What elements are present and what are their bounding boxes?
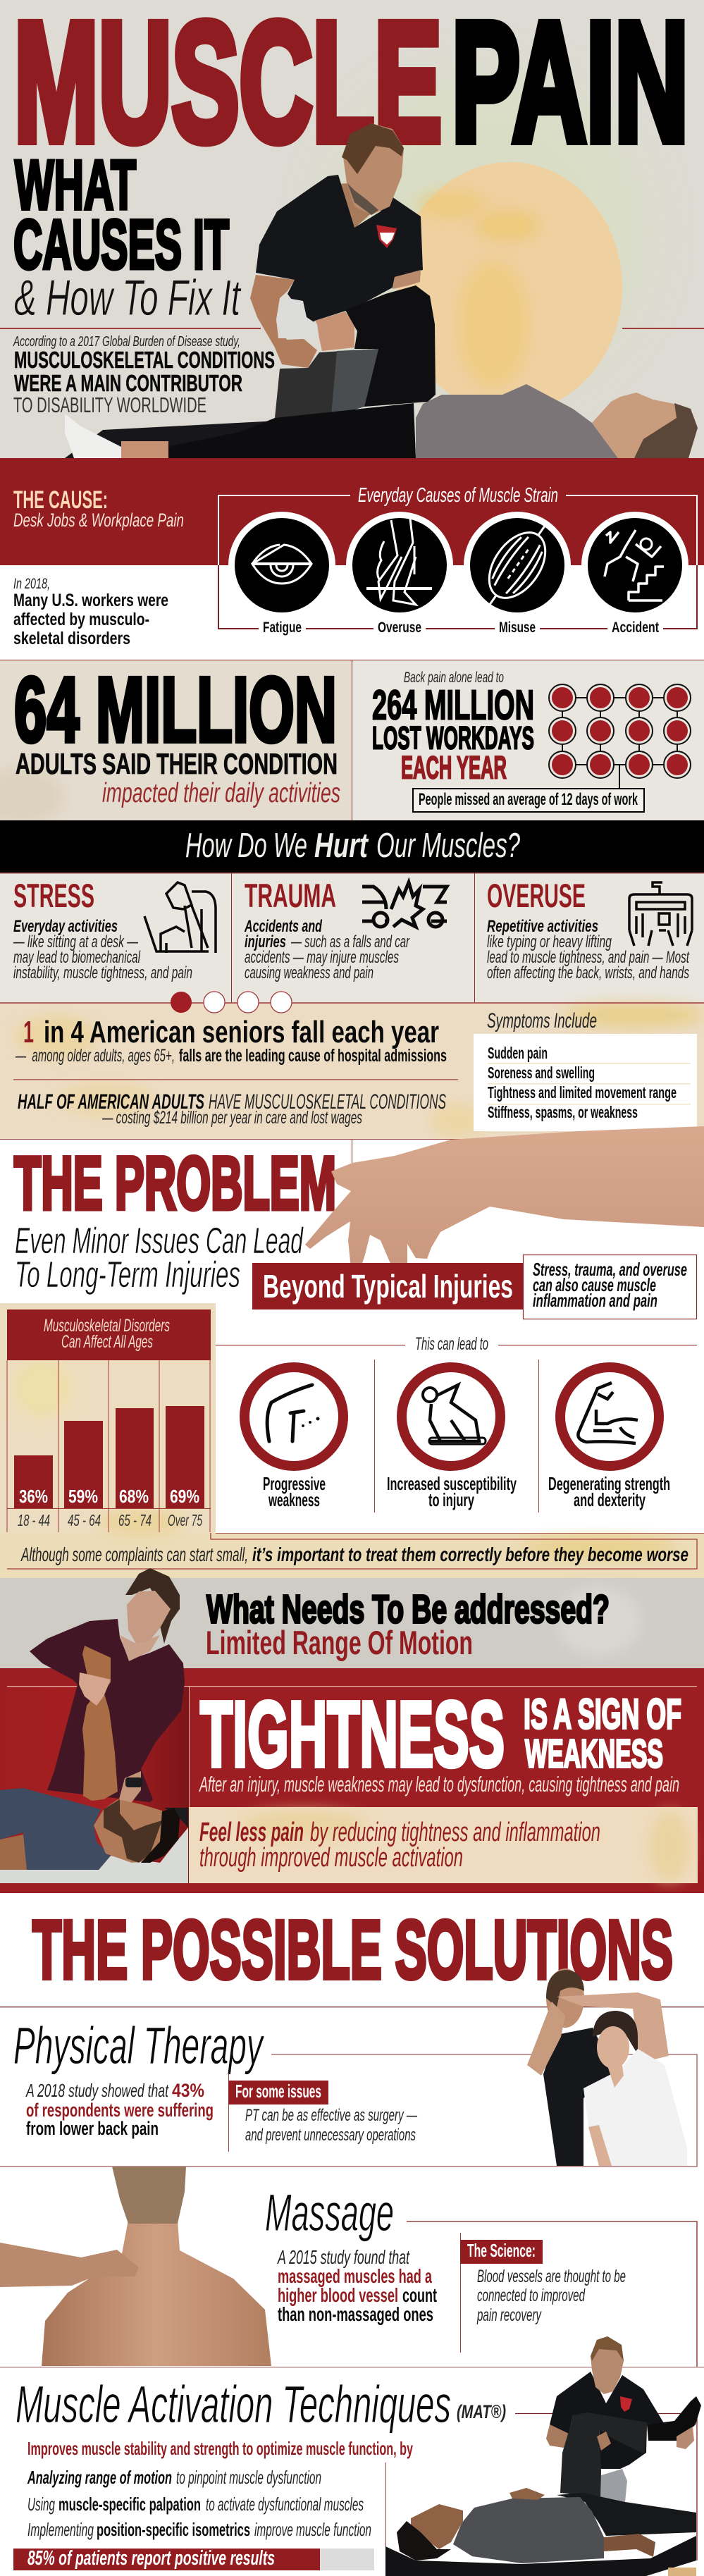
intro text: According to a 2017 Global Burden of Disease study, [13, 334, 240, 350]
sun circle [397, 162, 622, 413]
list: mat methods: to pinpoint muscle dysfunction [176, 2467, 321, 2488]
cause labels [263, 620, 659, 636]
panel: 64 million: 64 MILLION [14, 658, 337, 761]
callout: feel less pain: Feel less pain [199, 1818, 304, 1847]
panel: muscle activation techniques: Muscle Activation Techniques [16, 2375, 451, 2434]
text: treat correctly: Although some complaints can start small, [20, 1543, 248, 1565]
icon: keyboard hands [629, 882, 692, 946]
callout: beyond typical injuries: Beyond Typical Injuries [263, 1268, 513, 1305]
panel: hero [0, 0, 704, 458]
symptoms list [474, 1009, 697, 1131]
cause labels: Fatigue [263, 620, 302, 636]
bar chart: disorders by age: Musculoskeletal Disorders [44, 1316, 170, 1336]
subtitle [13, 159, 242, 316]
text: 2018 study: of respondents were suffering [26, 2100, 214, 2121]
panel: muscle activation techniques: Improves muscle stability and strength to optimize muscle function, by [27, 2438, 413, 2459]
intro text: WERE A MAIN CONTRIBUTOR [14, 370, 242, 396]
panel: chart background [0, 1303, 704, 1578]
panel: stress [13, 877, 216, 982]
cause heading [13, 486, 184, 531]
text: 2015 study: higher blood vessel [278, 2284, 398, 2306]
panel: muscle activation techniques: (MAT®) [457, 2401, 506, 2422]
heading: the problem [14, 1140, 336, 1295]
bar chart: disorders by age [7, 1309, 211, 1532]
panel: stress: — like sitting at a desk — [13, 932, 139, 951]
text: 2018 study: A 2018 study showed that [25, 2080, 169, 2101]
causes frame: Everyday Causes of Muscle Strain [358, 484, 558, 507]
text: 2015 study [277, 2246, 437, 2325]
bar: over 75: 69% [170, 1486, 199, 1507]
icon: progressive weakness: weakness [268, 1489, 320, 1510]
icon: accident fall [581, 512, 688, 619]
cause labels: Accident [612, 620, 659, 636]
icon: desk worker [144, 882, 216, 953]
intro text [13, 334, 275, 417]
bar: 65-74: 68% [119, 1486, 149, 1507]
panel: stress: instability, muscle tightness, and pain [13, 963, 192, 982]
bar: 65-74 [116, 1408, 154, 1529]
panel: the cause [0, 458, 704, 661]
stat: half of adults: HAVE MUSCULOSKELETAL CONDITIONS [209, 1090, 446, 1114]
panel: trauma: — such as a falls and car [290, 932, 410, 951]
panel: what needs to be addressed: Limited Range Of Motion [206, 1624, 473, 1661]
text: treat correctly [20, 1543, 688, 1565]
callout: the science [460, 2240, 626, 2325]
bar: 18-44: 36% [19, 1486, 48, 1507]
callout: the science: The Science: [467, 2240, 536, 2261]
stat: one in four [15, 1015, 447, 1066]
icon: degenerating strength [548, 1367, 670, 1510]
callout: feel less pain: through improved muscle activation [199, 1843, 463, 1873]
workers text [13, 576, 168, 648]
panel: stress: Everyday activities [13, 917, 118, 936]
stat: one in four: — among older adults, ages 65+, [15, 1046, 175, 1066]
icon: degenerating strength: and dexterity [574, 1489, 646, 1510]
icon: misuse muscle [464, 512, 571, 620]
bar chart: disorders by age: Can Affect All Ages [61, 1332, 153, 1352]
panel: stress: STRESS [13, 877, 94, 914]
stat: one in four: falls are the leading cause of hospital admissions [179, 1046, 447, 1066]
panel: physical therapy [0, 1968, 704, 2167]
photo: reaching hand [305, 1126, 704, 1273]
heading: the problem: THE PROBLEM [14, 1140, 336, 1225]
panel: three causes [0, 873, 704, 1003]
callout: for some issues: and prevent unnecessary operations [245, 2126, 416, 2145]
panel: tightness [0, 1568, 704, 1893]
stat: one in four: in 4 American seniors fall each year [44, 1015, 439, 1049]
intro text: MUSCULOSKELETAL CONDITIONS [14, 347, 275, 373]
panel: trauma: TRAUMA [245, 877, 336, 914]
heading band: how do we hurt: How Do We [185, 827, 307, 865]
list: mat methods: improve muscle function [254, 2519, 371, 2540]
panel: trauma: injuries [245, 932, 286, 951]
panel: massage [0, 2167, 704, 2368]
panel: 64 million [0, 658, 352, 825]
workers text: affected by musculo- [13, 610, 149, 629]
panel: muscle activation techniques [13, 2336, 701, 2576]
callout: feel less pain [189, 1807, 698, 1883]
progress bar: 85 percent: 85% of patients report positive results [27, 2547, 275, 2570]
panel: lost workdays: Back pain alone lead to [404, 670, 504, 686]
callout: days missed [413, 789, 644, 812]
callout: beyond typical injuries [252, 1263, 523, 1309]
panel: lost workdays: LOST WORKDAYS [372, 720, 534, 756]
photo: mat therapist and patient [385, 2336, 701, 2576]
panel: massage: Massage [265, 2183, 394, 2242]
panel: overuse: Repetitive activities [487, 917, 598, 936]
bar: 18-44: 18 - 44 [18, 1511, 50, 1529]
icon: car crash [362, 882, 447, 927]
panel: overuse: OVERUSE [487, 877, 586, 914]
workers text: Many U.S. workers were [13, 591, 168, 610]
stat: half of adults: HALF OF AMERICAN ADULTS [18, 1090, 204, 1114]
panel: lost workdays: EACH YEAR [401, 750, 507, 785]
heading: the problem: To Long-Term Injuries [15, 1255, 240, 1295]
text: 2015 study: A 2015 study found that [277, 2246, 410, 2268]
panel: lost workdays: 264 MILLION [372, 682, 534, 729]
panel: physical therapy: Physical Therapy [13, 2016, 264, 2075]
panel: stress: may lead to biomechanical [13, 948, 140, 967]
bar: 65-74: 65 - 74 [118, 1511, 152, 1529]
panel: the problem [0, 1126, 704, 1533]
photo: therapist and patient [65, 123, 698, 458]
photo: therapist stretching patient [0, 1568, 188, 1883]
heading: this can lead to: This can lead to [415, 1334, 488, 1354]
icon: overuse legs [346, 512, 453, 619]
cause heading: Desk Jobs & Workplace Pain [13, 510, 184, 531]
text: 2015 study: massaged muscles had a [278, 2265, 432, 2287]
timeline dots [171, 992, 292, 1013]
photo: massaged back [0, 2167, 271, 2366]
list: mat methods [27, 2467, 371, 2540]
workers text: skeletal disorders [13, 629, 130, 648]
stat: half of adults: — costing $214 billion per year in care and lost wages [101, 1108, 362, 1128]
list: mat methods: muscle-specific palpation [58, 2494, 201, 2515]
dot grid [549, 684, 691, 788]
callout: the science: connected to improved [477, 2286, 586, 2305]
callout: for some issues: PT can be as effective as surgery — [245, 2106, 418, 2125]
workers text: In 2018, [13, 576, 50, 592]
heading: the possible solutions [0, 1893, 704, 2576]
bar: 45-64: 59% [68, 1486, 98, 1507]
panel: what needs to be addressed [0, 1578, 704, 1668]
panel: 64 million: ADULTS SAID THEIR CONDITION [16, 747, 338, 780]
subtitle: & How To Fix It [14, 271, 242, 326]
stat: half of adults [18, 1090, 446, 1128]
icon: progressive weakness: Progressive [263, 1473, 326, 1494]
panel: lost workdays [352, 660, 704, 820]
text: 2015 study: count [402, 2284, 437, 2306]
panel: overuse [487, 877, 692, 982]
photo: physical therapy stretch [527, 1968, 687, 2166]
causes frame [218, 484, 697, 629]
heading: the problem: Even Minor Issues Can Lead [15, 1221, 304, 1262]
symptoms list: Symptoms Include [487, 1009, 597, 1033]
cause heading: THE CAUSE: [13, 486, 108, 514]
heading band: how do we hurt [0, 820, 704, 873]
callout: for some issues [228, 2081, 418, 2145]
text: 2015 study: than non-massaged ones [278, 2303, 433, 2325]
heading band: how do we hurt: Hurt [314, 827, 369, 865]
panel: trauma [244, 877, 447, 982]
icon: increased susceptibility: Increased susceptibility [387, 1473, 517, 1494]
bar: 45-64: 45 - 64 [68, 1511, 101, 1529]
panel: trauma: Accidents and [244, 917, 323, 936]
callout: for some issues: For some issues [235, 2081, 321, 2102]
heading band: how do we hurt: Our Muscles? [376, 827, 520, 865]
icon: increased susceptibility: to injury [428, 1489, 474, 1510]
icon: fatigue eye [228, 512, 335, 619]
text: 2018 study [25, 2080, 214, 2139]
list: mat methods: to activate dysfunctional muscles [206, 2494, 364, 2515]
text: 2018 study: from lower back pain [26, 2118, 159, 2139]
panel: overuse: like typing or heavy lifting [487, 932, 612, 951]
panel: 64 million: impacted their daily activities [102, 778, 340, 808]
bar: over 75: Over 75 [168, 1511, 202, 1529]
icon: increased susceptibility [387, 1367, 517, 1510]
symptoms list: Sudden pain [488, 1044, 548, 1062]
text: 2018 study: 43% [172, 2080, 204, 2101]
icon: progressive weakness [245, 1367, 343, 1510]
cause labels: Overuse [378, 620, 421, 636]
list: mat methods: Using [27, 2494, 55, 2515]
stat: one in four: 1 [23, 1015, 34, 1049]
list: mat methods: Implementing [27, 2519, 94, 2540]
subtitle: WHAT [15, 145, 136, 224]
callout: inflammation [523, 1255, 696, 1319]
bar: 45-64 [64, 1421, 103, 1529]
list: mat methods: Analyzing range of motion [27, 2467, 172, 2488]
symptoms list: Soreness and swelling [488, 1064, 595, 1082]
panel: trauma: accidents — may injure muscles [245, 948, 399, 967]
cause labels: Misuse [499, 620, 536, 636]
intro text: TO DISABILITY WORLDWIDE [13, 393, 206, 417]
bar: 18-44 [14, 1455, 53, 1529]
callout: the science: pain recovery [476, 2305, 542, 2325]
list: mat methods: position-specific isometrics [97, 2519, 250, 2540]
bar: over 75 [166, 1406, 204, 1529]
subtitle: CAUSES IT [13, 205, 229, 283]
panel: trauma: causing weakness and pain [245, 963, 373, 982]
panel: statistics [0, 992, 704, 1140]
